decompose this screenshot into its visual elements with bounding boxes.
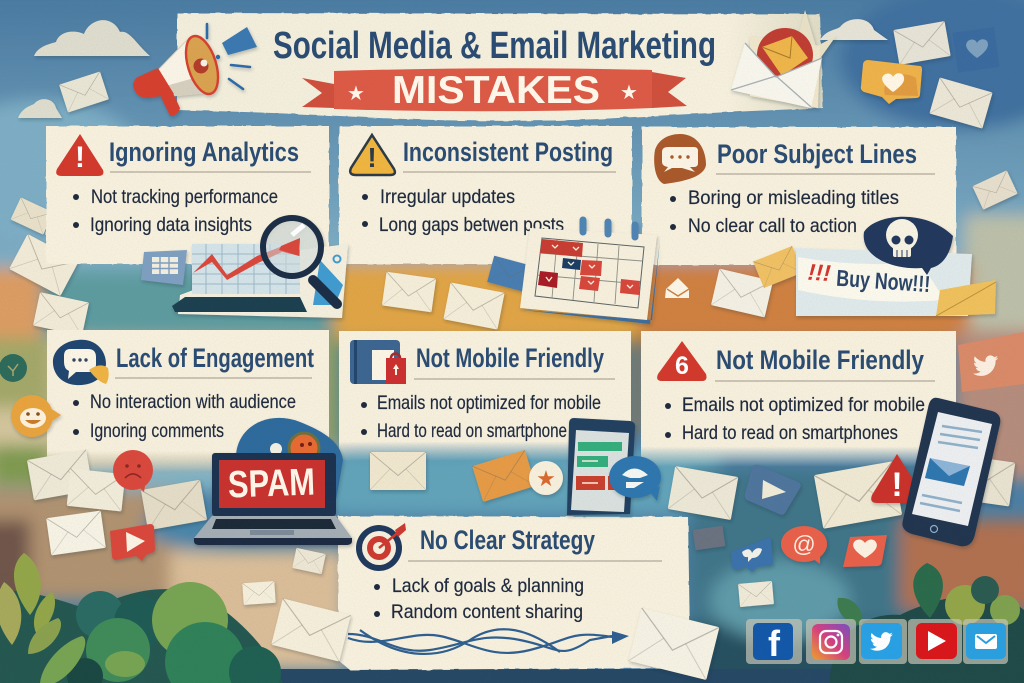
icon: yellow warning triangle bbox=[350, 135, 395, 175]
icon: red triangle with number 6 bbox=[657, 341, 706, 381]
icon: red warning triangle: ! bbox=[75, 141, 85, 174]
icon: youtube bbox=[916, 623, 957, 659]
icon: red sad bubble bbox=[113, 450, 153, 492]
illustration: large phone bbox=[902, 398, 1000, 546]
decorative envelopes: lower left bbox=[27, 450, 207, 555]
icon: facebook bbox=[753, 623, 793, 664]
heading: Not Mobile Friendly bbox=[716, 345, 924, 375]
panel: header bbox=[177, 13, 823, 121]
icon: blue play tile bbox=[745, 465, 801, 515]
icon: heart tile bbox=[843, 535, 887, 567]
bullet list: Irregular updates bbox=[380, 186, 515, 208]
icon: brown chat blob bbox=[654, 134, 706, 184]
bullet list bbox=[374, 575, 584, 623]
bullet list bbox=[73, 391, 296, 442]
heading: Poor Subject Lines bbox=[717, 139, 917, 169]
decorative: twitter tile bbox=[958, 332, 1024, 392]
icon: small white envelope bbox=[665, 278, 689, 298]
bullet list: No interaction with audience bbox=[90, 391, 296, 413]
icon: green badge bbox=[0, 354, 27, 382]
bullet list: Hard to read on smartphone bbox=[377, 420, 567, 442]
icon: orange heart chat bubble bbox=[861, 60, 922, 104]
heading: Lack of Engagement bbox=[116, 343, 314, 373]
bullet list: Emails not optimized for mobile bbox=[682, 394, 925, 416]
foliage: bottom left bbox=[0, 553, 283, 683]
bullet list: No clear call to action bbox=[688, 215, 857, 237]
icon: at sign bubble: @ bbox=[792, 531, 816, 557]
illustration: buy now spam email bbox=[796, 217, 996, 316]
ribbon banner bbox=[302, 68, 687, 112]
heading: Inconsistent Posting bbox=[403, 137, 613, 167]
bullet list: Ignoring comments bbox=[90, 420, 224, 442]
panel: poor subject lines bbox=[642, 127, 956, 265]
icon: instagram bbox=[812, 624, 850, 660]
bullet list bbox=[665, 394, 925, 444]
icon: yellow warning triangle: ! bbox=[367, 142, 377, 173]
ribbon banner: ★ bbox=[620, 82, 638, 104]
icon: target with arrow bbox=[356, 523, 406, 571]
illustration: small phone bbox=[567, 418, 635, 515]
icon: blue bird chat bbox=[731, 538, 773, 572]
icon: red warning triangle bbox=[56, 134, 103, 176]
title: Social Media & Email Marketing bbox=[273, 25, 716, 67]
icon: twitter bbox=[861, 623, 902, 659]
icon: red play bubble bbox=[110, 524, 155, 561]
bullet list: Long gaps betwen posts bbox=[379, 214, 564, 236]
bullet list: Boring or misleading titles bbox=[688, 187, 899, 209]
icon: orange star circle: ★ bbox=[536, 466, 556, 491]
bullet list: Lack of goals & planning bbox=[392, 575, 584, 597]
buy now text: Buy Now!!! bbox=[836, 265, 931, 297]
bullet list bbox=[361, 392, 601, 442]
buy now text: !!! bbox=[807, 259, 832, 286]
heading: No Clear Strategy bbox=[420, 525, 595, 555]
icon: navy chat blob bbox=[53, 340, 109, 385]
bullet list: Emails not optimized for mobile bbox=[377, 392, 601, 414]
bullet list: Random content sharing bbox=[391, 601, 583, 623]
icon: at sign bubble bbox=[781, 526, 827, 564]
foliage: bottom right bbox=[830, 563, 1024, 683]
bullet list: Not tracking performance bbox=[91, 186, 278, 208]
decorative envelopes: middle band bbox=[382, 246, 803, 330]
bullet list bbox=[670, 187, 899, 237]
illustration: analytics chart with magnifier bbox=[141, 218, 348, 318]
icon: orange smile bubble bbox=[11, 395, 61, 437]
bullet list bbox=[73, 186, 278, 236]
skull speech bubble bbox=[864, 217, 953, 275]
spam label: SPAM bbox=[227, 461, 316, 506]
illustration: calendar bbox=[520, 220, 660, 324]
illustration: spam laptop bbox=[194, 418, 352, 545]
icon: orange star circle bbox=[529, 461, 563, 495]
icon: email bbox=[966, 623, 1006, 659]
icon: red warning triangle near phone bbox=[871, 454, 923, 504]
icon: red warning triangle near phone: ! bbox=[891, 466, 903, 504]
bullet list: Ignoring data insights bbox=[90, 214, 252, 236]
bullet list bbox=[362, 186, 564, 236]
social media icons bbox=[746, 619, 1008, 664]
clouds bbox=[18, 19, 888, 118]
icon: red triangle with number 6: 6 bbox=[675, 352, 689, 380]
icon: mobile and lock bbox=[350, 340, 406, 384]
icon: header envelope with yellow letter bbox=[731, 10, 836, 108]
panel: not mobile friendly, right bbox=[641, 331, 956, 467]
panel: lack of engagement bbox=[47, 330, 329, 472]
arrow: tangled path bbox=[348, 629, 629, 654]
decorative envelopes: left and top right bbox=[9, 21, 1018, 336]
decorative envelopes: lower center bbox=[242, 450, 1015, 680]
icon: megaphone bbox=[133, 24, 257, 116]
heading: Not Mobile Friendly bbox=[416, 343, 604, 373]
icon: facebook: f bbox=[768, 623, 781, 664]
icon: faint heart tile bbox=[952, 27, 1000, 73]
panel: not mobile friendly, center bbox=[339, 331, 631, 461]
ribbon banner: MISTAKES bbox=[392, 69, 600, 112]
buy now text bbox=[807, 259, 931, 297]
heading: Ignoring Analytics bbox=[109, 137, 299, 167]
bullet list: Hard to read on smartphones bbox=[682, 422, 898, 444]
panel: inconsistent posting bbox=[339, 126, 632, 264]
icon: blue chat bubble bbox=[609, 456, 661, 501]
panel: ignoring analytics bbox=[46, 126, 329, 264]
panel: no clear strategy bbox=[338, 516, 690, 670]
ribbon banner: ★ bbox=[347, 83, 365, 105]
